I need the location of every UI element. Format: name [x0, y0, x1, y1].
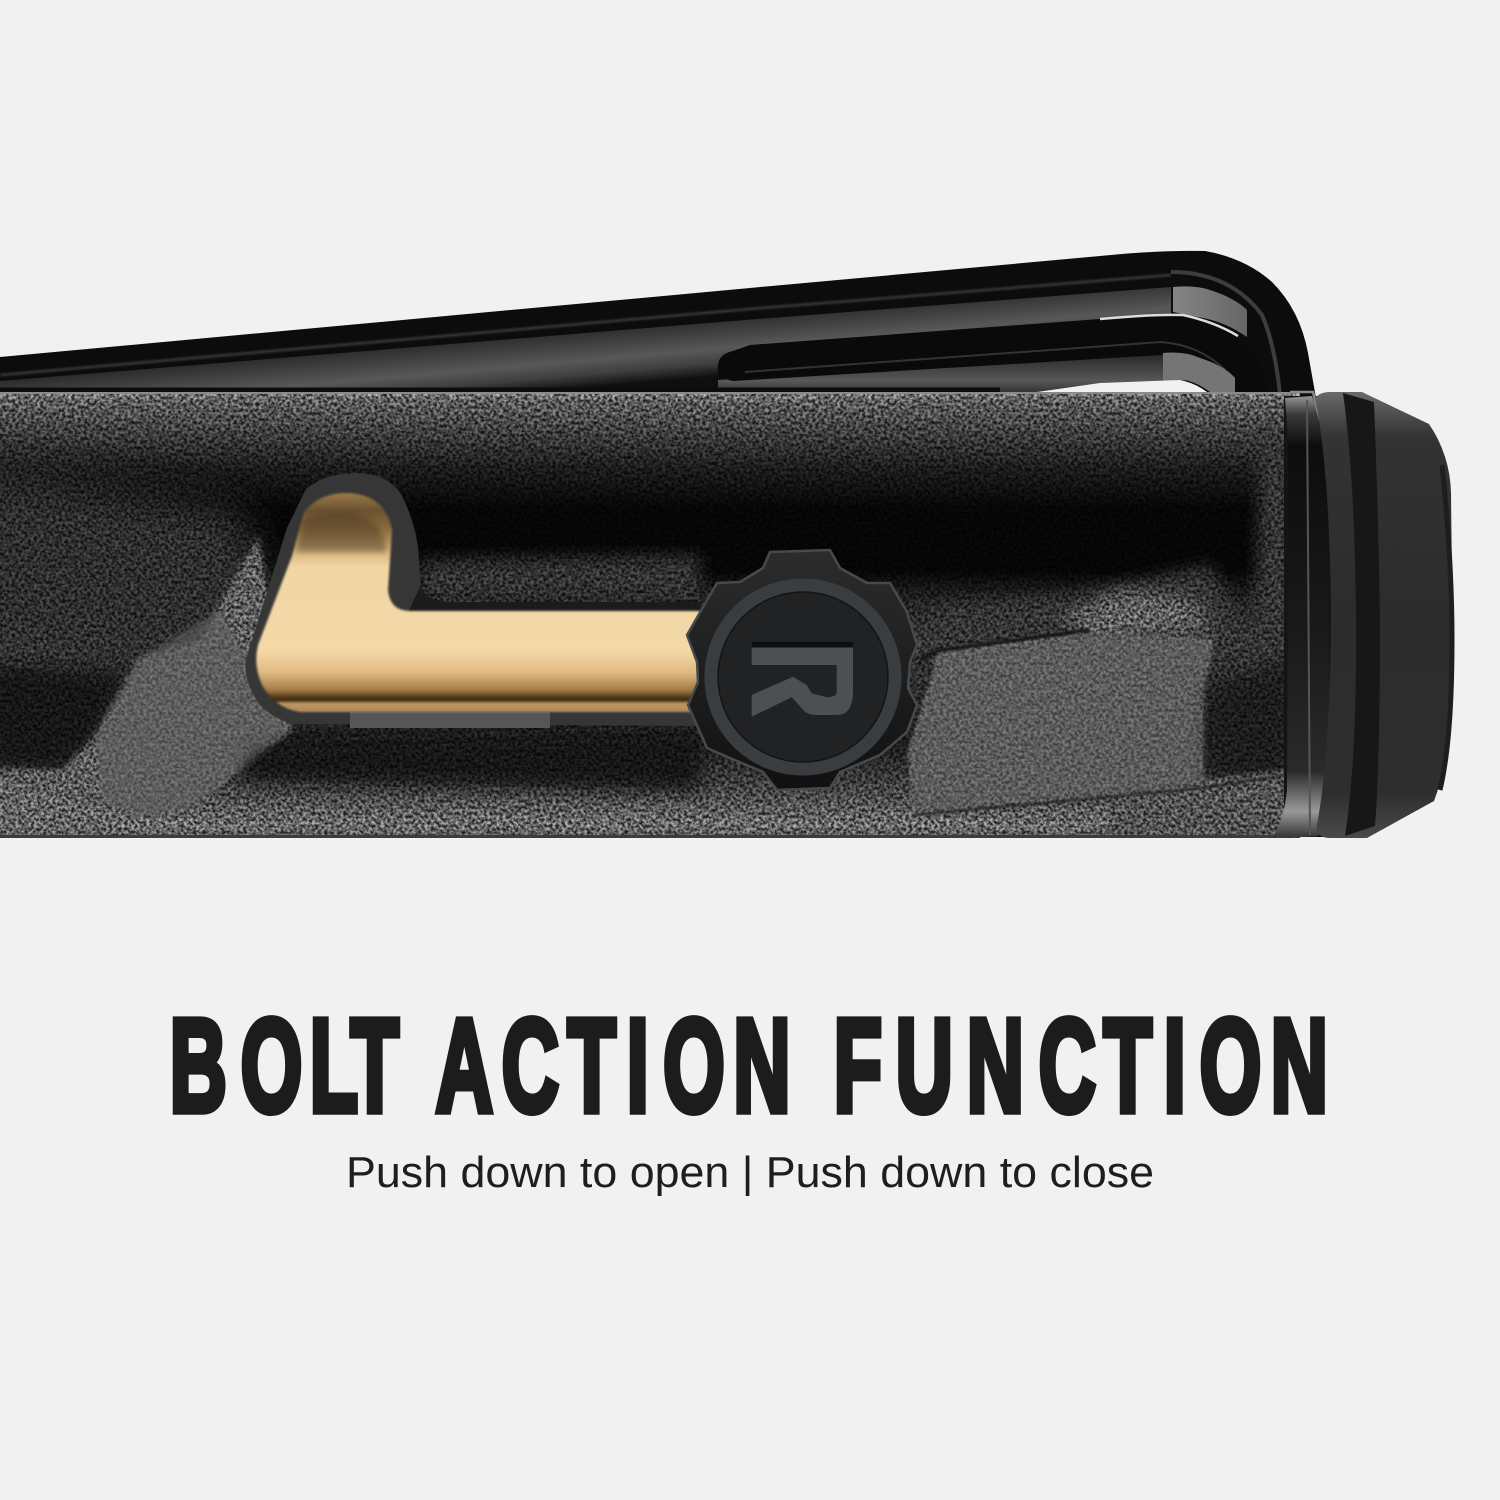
knob face — [718, 592, 888, 762]
barrel shading — [0, 430, 1300, 840]
knob gear — [687, 550, 917, 790]
R logo — [752, 642, 853, 717]
end cap — [1315, 392, 1453, 838]
cap dark stripe — [1343, 393, 1380, 836]
leather texture — [0, 392, 1300, 838]
bolt slot — [246, 473, 700, 728]
knob ring — [704, 578, 902, 776]
pocket clip — [0, 251, 1316, 398]
barrel — [0, 392, 1300, 840]
collar ring — [1272, 392, 1340, 838]
product: pen barrel with clip and bolt action — [0, 251, 1453, 840]
R knob — [687, 550, 917, 790]
clip slot prong — [718, 315, 1268, 394]
smooth worn patches — [96, 610, 1290, 817]
subtitle: Push down to open | Push down to close — [346, 1148, 1154, 1197]
brass bolt — [256, 493, 700, 712]
title: BOLT ACTION FUNCTION — [170, 992, 1328, 1140]
